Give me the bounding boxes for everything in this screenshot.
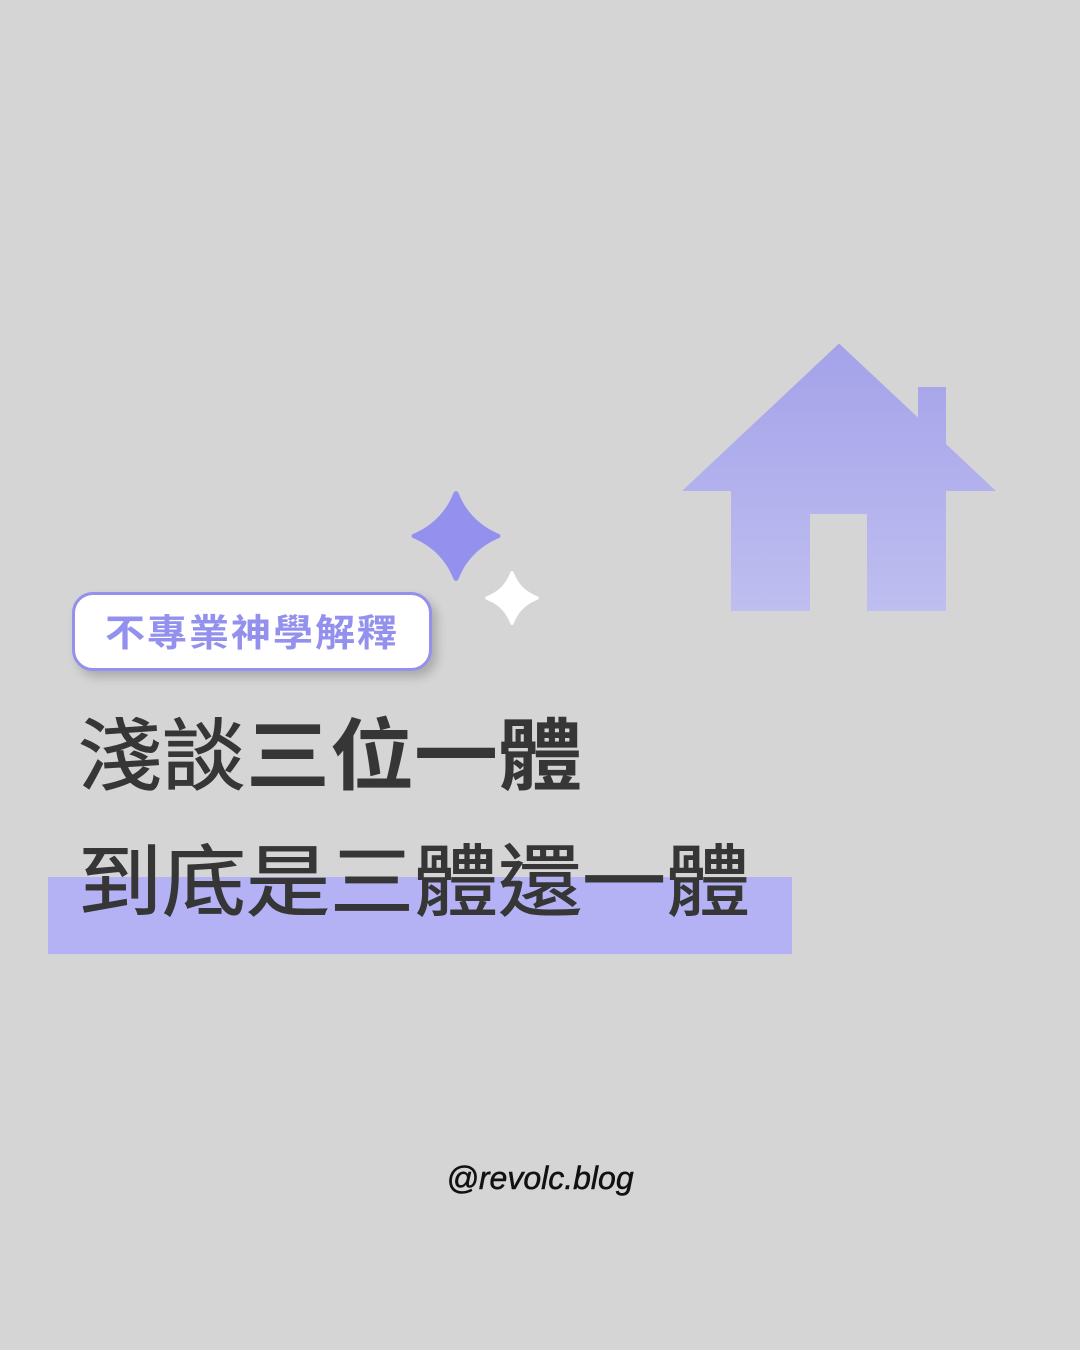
icon: small white sparkle xyxy=(485,571,539,625)
heading line 2: 到底是三體還一體 xyxy=(78,839,750,926)
tag: 不專業神學解釋 xyxy=(72,592,432,671)
highlight bar xyxy=(48,877,792,954)
tag: 不專業神學解釋: 不專業神學解釋 xyxy=(105,613,399,655)
handle: @revolc.blog: @revolc.blog xyxy=(446,1160,634,1196)
icon: large purple sparkle xyxy=(412,491,500,581)
icon: house xyxy=(682,344,996,611)
heading line 1: 淺談三位一體 xyxy=(78,713,582,800)
